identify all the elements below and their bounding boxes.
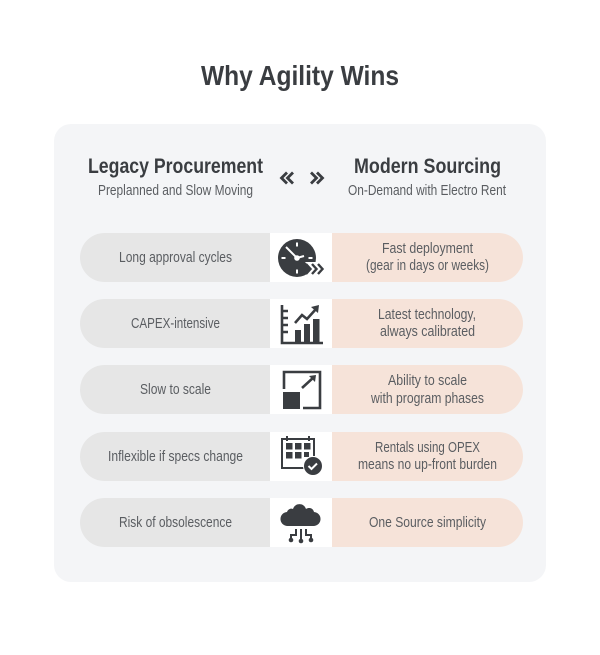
label: inflexible if specs change: Inflexible if specs change [108,448,243,465]
heading: legacy procurement: Legacy Procurement [88,155,263,178]
label: capex-intensive: CAPEX-intensive [131,315,220,332]
text: with program phases: with program phases [370,390,484,407]
row 2 [80,299,523,348]
icon: clock with arrows [278,239,325,277]
subheading: legacy: Preplanned and Slow Moving [98,182,253,199]
icon: calendar check [282,436,322,476]
text: always calibrated: always calibrated [380,323,475,340]
icon: cloud network [280,504,321,543]
heading: modern sourcing: Modern Sourcing [354,155,501,178]
icon: scale up [283,372,320,409]
text: rentals using opex: Rentals using OPEX [375,439,480,456]
text: one source simplicity: One Source simplicity [369,514,486,531]
text: ability to scale: Ability to scale [388,372,467,389]
row 5 [80,498,523,547]
text: gear in days or weeks: (gear in days or weeks) [366,257,489,274]
row 4 [80,432,523,481]
icon: left chevrons [282,172,293,184]
text: fast deployment: Fast deployment [382,240,474,257]
subheading: modern: On-Demand with Electro Rent [348,182,507,199]
row 1 [80,233,523,282]
title: Why Agility Wins [201,60,399,91]
icon: growth chart [282,305,323,343]
label: long approval cycles: Long approval cycles [119,249,232,266]
text: latest technology: Latest technology, [378,306,476,323]
panel: comparison card [54,124,546,582]
row 3 [80,365,523,414]
text: no up-front burden: means no up-front burden [358,456,497,473]
label: risk of obsolescence: Risk of obsolescence [119,514,232,531]
label: slow to scale: Slow to scale [140,381,211,398]
icon: right chevrons [311,172,322,184]
